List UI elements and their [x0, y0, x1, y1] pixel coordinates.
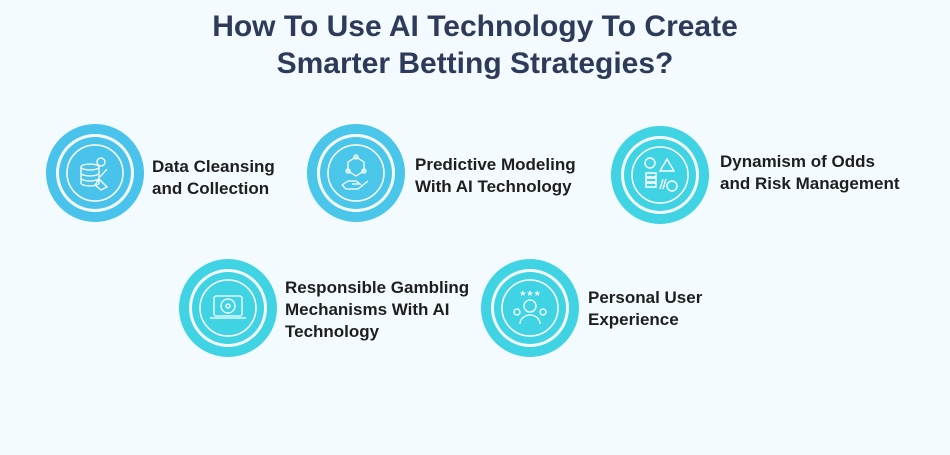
icon: hand with network: [312, 129, 400, 217]
panel: personal user experience: [486, 264, 703, 352]
icon: database with brush: [51, 129, 139, 217]
icon: user with stars: ★★★: [519, 289, 541, 298]
title: [212, 10, 738, 80]
title: How To Use AI Technology To Create: [212, 10, 738, 43]
panel: responsible gambling: [184, 264, 469, 352]
text: responsible gambling: Responsible Gambling: [285, 278, 469, 297]
panel: predictive modeling: [312, 129, 576, 217]
panel: responsible gambling: Mechanisms With AI: [285, 300, 450, 319]
panel: predictive modeling: With AI Technology: [415, 177, 572, 196]
panel: data cleansing: and Collection: [152, 179, 269, 198]
icon: coins and warning: [616, 131, 704, 219]
text: data cleansing: Data Cleansing: [152, 157, 275, 176]
panel: responsible gambling: Technology: [285, 322, 380, 341]
icon: laptop roulette: [184, 264, 272, 352]
panel: dynamism of odds: [616, 131, 900, 219]
text: predictive modeling: Predictive Modeling: [415, 155, 576, 174]
icon: user with stars: [486, 264, 574, 352]
text: personal user experience: Personal User: [588, 288, 703, 307]
panel: data cleansing: [51, 129, 275, 217]
title: Smarter Betting Strategies?: [277, 47, 673, 80]
text: dynamism of odds: Dynamism of Odds: [720, 152, 875, 171]
panel: dynamism of odds: and Risk Management: [720, 174, 900, 193]
panel: personal user experience: Experience: [588, 310, 679, 329]
